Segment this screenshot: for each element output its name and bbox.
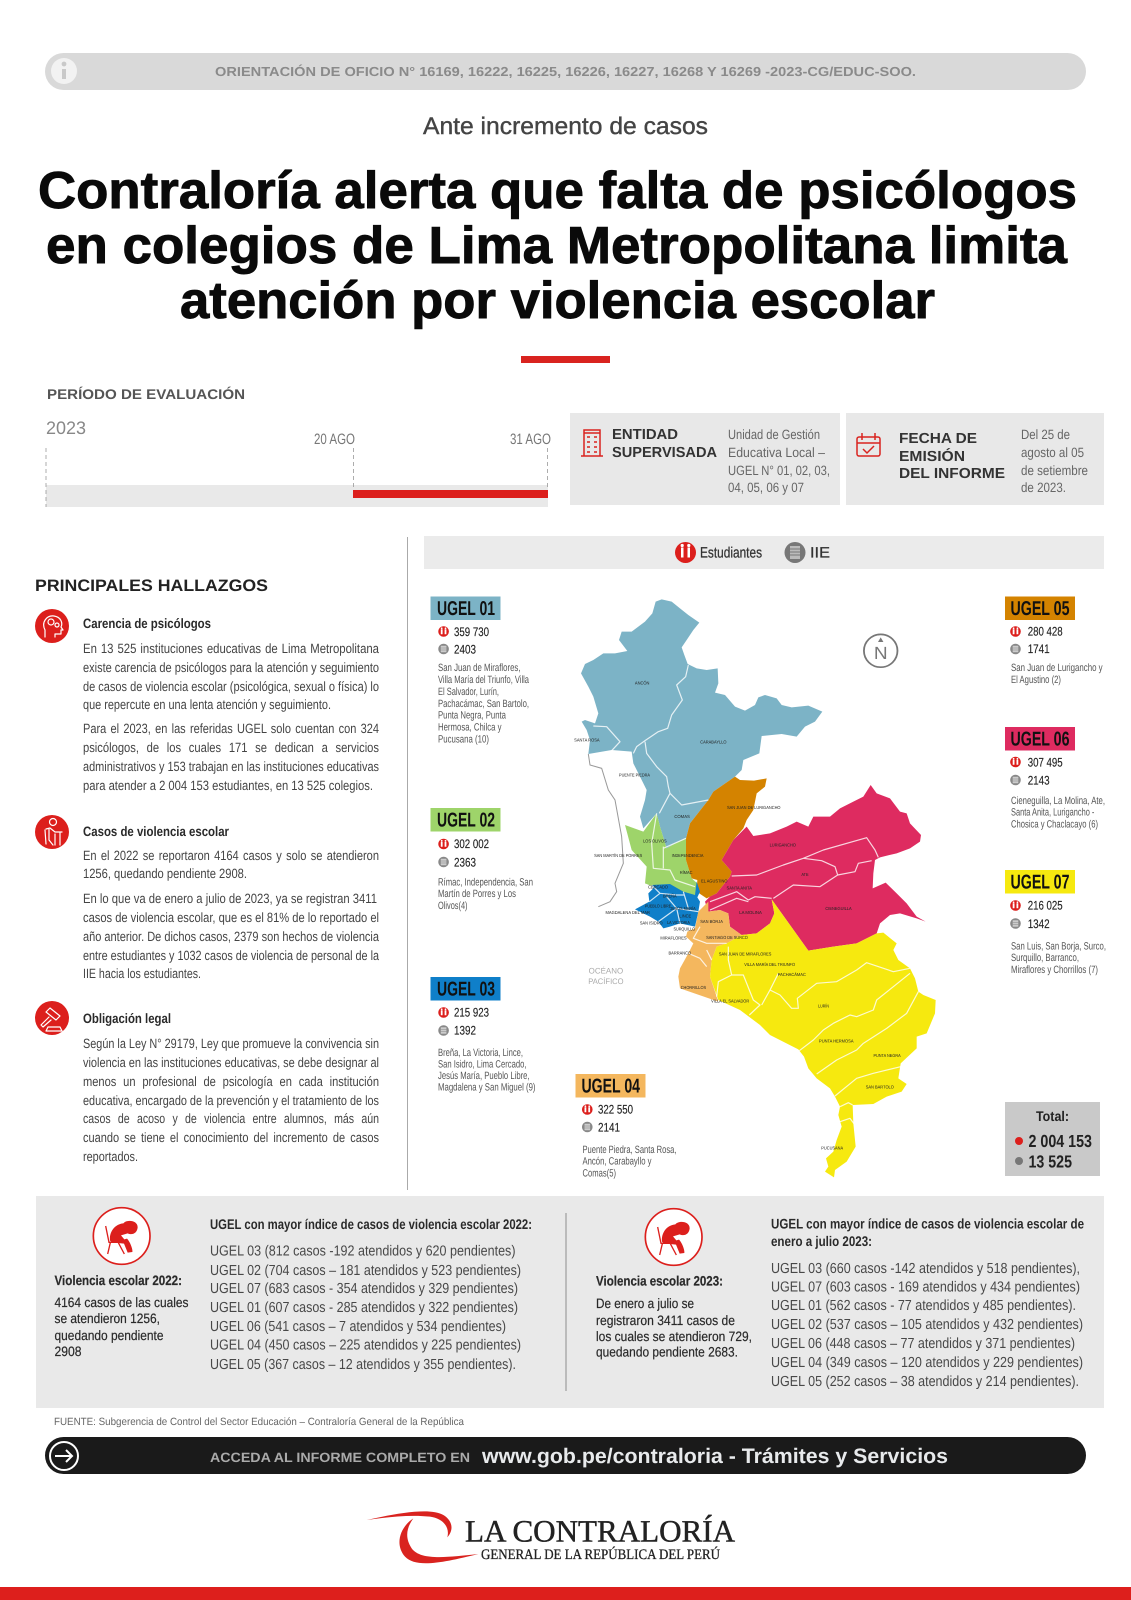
card: UGEL 03: Magdalena y San Miguel (9) xyxy=(438,1082,536,1094)
map district labels: VILLA EL SALVADOR xyxy=(711,999,749,1004)
card: UGEL 02 xyxy=(430,808,533,912)
finding: casos de violencia escolar: entre estudiantes y 1032 casos de violencia de personal de la xyxy=(83,948,379,963)
block: violencia escolar 2023: UGEL 01 (562 casos - 77 atendidos y 485 pendientes). xyxy=(771,1298,1076,1314)
finding: carencia de psicólogos: que repercute en una lenta atención y seguimiento. xyxy=(83,697,331,712)
icon: distressed student 2022 xyxy=(92,1206,151,1266)
total box: Total: xyxy=(1036,1108,1069,1124)
timeline: período de evaluación xyxy=(46,386,551,507)
map district labels: LA MOLINA xyxy=(739,910,762,915)
map district labels: MIRAFLORES xyxy=(660,936,687,941)
label: océano pacífico: OCÉANO xyxy=(589,966,623,976)
district boundaries xyxy=(593,665,918,1125)
card: UGEL 05: El Agustino (2) xyxy=(1011,674,1061,686)
block: violencia escolar 2023: registraron 3411 casos de xyxy=(596,1313,735,1328)
legend bar: Estudiantes xyxy=(700,544,762,562)
map district labels: JESÚS MARÍA xyxy=(670,906,696,911)
label: océano pacífico xyxy=(588,966,624,986)
card: UGEL 01: 359 730 xyxy=(454,625,489,639)
card: UGEL 07: Miraflores y Chorrillos (7) xyxy=(1011,964,1098,976)
block: violencia escolar 2023: quedando pendiente 2683. xyxy=(596,1344,738,1360)
timeline: período de evaluación: 31 AGO xyxy=(510,431,551,448)
card: UGEL 01: UGEL 01 xyxy=(437,598,495,620)
block: violencia escolar 2023: UGEL 07 (603 casos - 169 atendidos y 434 pendientes) xyxy=(771,1280,1080,1296)
finding: casos de violencia escolar: casos de violencia escolar, que es el 81% de lo reportado el xyxy=(83,910,379,925)
card: UGEL 04: 322 550 xyxy=(598,1102,633,1116)
region: UGEL 07 xyxy=(710,899,936,1177)
finding: carencia de psicólogos: para atender a 2 004 153 estudiantes, en 13 525 colegios. xyxy=(83,778,373,793)
map district labels: PUENTE PIEDRA xyxy=(619,773,650,778)
map district labels: ANCÓN xyxy=(635,680,649,686)
call to action bar: ACCEDA AL INFORME COMPLETO EN xyxy=(210,1450,470,1465)
card: UGEL 04: UGEL 04 xyxy=(582,1076,641,1098)
block: violencia escolar 2023: UGEL 04 (349 casos – 120 atendidos y 229 pendientes) xyxy=(771,1355,1083,1371)
card: UGEL 04: Comas(5) xyxy=(582,1168,616,1180)
region: UGEL 05 xyxy=(686,777,767,898)
card: UGEL 01: Pucusana (10) xyxy=(438,734,489,746)
map district labels: SAN JUAN DE MIRAFLORES xyxy=(719,952,771,957)
banner: orientación de oficio: ORIENTACIÓN DE OFICIO N° 16169, 16222, 16225, 16226, 16227, 16268 Y 16269 -2023-CG/EDUC-SOO. xyxy=(215,64,916,79)
finding: casos de violencia escolar: En el 2022 se reportaron 4164 casos y solo se atendieron xyxy=(83,848,379,863)
panel: entidad supervisada: SUPERVISADA xyxy=(612,445,717,461)
card: UGEL 07: 1342 xyxy=(1028,917,1050,931)
heading: principales hallazgos: PRINCIPALES HALLAZGOS xyxy=(35,576,268,595)
finding: casos de violencia escolar: IIE hacia los estudiantes. xyxy=(83,966,201,981)
card: UGEL 02: Olivos(4) xyxy=(438,900,468,912)
column divider xyxy=(407,537,408,1190)
source note: FUENTE: Subgerencia de Control del Sector Educación – Contraloría General de la República xyxy=(54,1416,464,1428)
map district labels: LURÍN xyxy=(818,1004,829,1009)
icon: building xyxy=(581,430,603,456)
card: UGEL 06: UGEL 06 xyxy=(1010,728,1070,750)
timeline: período de evaluación: PERÍODO DE EVALUACIÓN xyxy=(47,386,245,402)
block: violencia escolar 2022 xyxy=(54,1208,532,1373)
title: Contraloría alerta que falta de psicólogos xyxy=(38,162,1077,220)
finding: carencia de psicólogos: psicólogos, de los cuales 171 se dedican a servicios xyxy=(83,740,379,755)
icon: calendar xyxy=(857,433,880,456)
card: UGEL 02: 302 002 xyxy=(454,837,489,851)
block: violencia escolar 2022: UGEL 02 (704 casos – 181 atendidos y 523 pendientes) xyxy=(210,1263,521,1279)
finding: obligación legal: menos un profesional de psicología en cada institución xyxy=(83,1074,379,1089)
card: UGEL 05: 1741 xyxy=(1028,642,1050,656)
logo: La Contraloría xyxy=(367,1511,736,1563)
map district labels: SAN ISIDRO xyxy=(640,921,663,926)
icon: north compass: N xyxy=(874,643,888,663)
footer band xyxy=(0,1587,1131,1600)
map district labels: SAN BARTOLO xyxy=(866,1085,894,1090)
map district labels: SURQUILLO xyxy=(673,927,695,932)
finding: obligación legal: reportados. xyxy=(83,1149,138,1164)
panel divider xyxy=(565,1213,567,1391)
map district labels: SANTA ANITA xyxy=(727,886,752,891)
card: UGEL 03: UGEL 03 xyxy=(437,978,495,1000)
region: UGEL 01 xyxy=(581,599,822,848)
block: violencia escolar 2023: UGEL 02 (537 casos – 105 atendidos y 432 pendientes) xyxy=(771,1317,1083,1333)
panel: fecha de emisión: EMISIÓN xyxy=(899,448,965,465)
panel: entidad supervisada: Unidad de Gestión xyxy=(728,427,820,442)
icon: estudiantes xyxy=(675,542,696,563)
logo: La Contraloría: LA CONTRALORÍA xyxy=(465,1514,736,1548)
finding: obligación legal: violencia en las instituciones educativas, se debe designar al xyxy=(83,1055,379,1070)
map district labels xyxy=(574,680,901,1151)
map district labels: LOS OLIVOS xyxy=(643,839,667,844)
card: UGEL 07: UGEL 07 xyxy=(1010,872,1070,894)
block: violencia escolar 2022: UGEL 05 (367 casos – 12 atendidos y 355 pendientes). xyxy=(210,1357,516,1373)
region: coast outline xyxy=(588,754,623,907)
card: UGEL 05: 280 428 xyxy=(1028,624,1063,638)
map district labels: SANTA ROSA xyxy=(574,738,600,743)
icon: student at desk xyxy=(35,815,69,849)
finding: casos de violencia escolar: En lo que va de enero a julio de 2023, ya se registran 3411 xyxy=(83,891,377,906)
map district labels: SAN BORJA xyxy=(700,919,723,924)
block: violencia escolar 2023: UGEL 05 (252 casos – 38 atendidos y 214 pendientes). xyxy=(771,1374,1079,1390)
panel: fecha de emisión: de setiembre xyxy=(1021,463,1088,478)
block: violencia escolar 2023: los cuales se atendieron 729, xyxy=(596,1329,752,1344)
card: UGEL 01: Villa María del Triunfo, Villa xyxy=(438,674,529,686)
map district labels: SAN MARTÍN DE PORRES xyxy=(594,853,642,858)
map district labels: CERCADO xyxy=(648,885,668,890)
panel: fecha de emisión: DEL INFORME xyxy=(899,466,1005,482)
card: UGEL 03: 1392 xyxy=(454,1024,476,1038)
block: violencia escolar 2022: quedando pendiente xyxy=(54,1328,164,1343)
map district labels: INDEPENDENCIA xyxy=(672,853,703,858)
card: UGEL 01: Hermosa, Chilca y xyxy=(438,722,502,734)
map district labels: COMAS xyxy=(674,814,690,819)
card: UGEL 02: Rímac, Independencia, San xyxy=(438,876,533,888)
card: UGEL 03 xyxy=(430,977,536,1094)
map district labels: EL AGUSTINO xyxy=(701,879,727,884)
finding: obligación legal: casos de acoso y de violencia entre alumnos, más aún xyxy=(83,1111,379,1126)
card: UGEL 06 xyxy=(1005,727,1105,830)
title xyxy=(38,162,1077,330)
block: violencia escolar 2022: UGEL 01 (607 casos - 285 atendidos y 322 pendientes) xyxy=(210,1300,518,1316)
card: UGEL 04: Puente Piedra, Santa Rosa, xyxy=(582,1144,676,1156)
map district labels: PUNTA HERMOSA xyxy=(819,1038,853,1044)
icon: distressed student 2023 xyxy=(644,1208,703,1266)
logo: La Contraloría: GENERAL DE LA REPÚBLICA DEL PERÚ xyxy=(481,1546,720,1563)
map district labels: CARABAYLLO xyxy=(700,740,727,745)
call to action bar: www.gob.pe/contraloria - Trámites y Servicios xyxy=(481,1445,948,1468)
map district labels: PUEBLO LIBRE xyxy=(645,904,671,909)
card: UGEL 01: San Juan de Miraflores, xyxy=(438,662,520,674)
card: UGEL 03: Breña, La Victoria, Lince, xyxy=(438,1047,523,1059)
banner: orientación de oficio xyxy=(45,53,1086,90)
card: UGEL 07: Surquillo, Barranco, xyxy=(1011,952,1079,964)
card: UGEL 05: San Juan de Lurigancho y xyxy=(1011,662,1103,674)
finding: carencia de psicólogos xyxy=(35,609,379,793)
block: violencia escolar 2022: 4164 casos de las cuales xyxy=(54,1295,189,1310)
card: UGEL 05: UGEL 05 xyxy=(1010,598,1070,620)
card: UGEL 01 xyxy=(430,596,529,746)
card: UGEL 03: Jesús María, Pueblo Libre, xyxy=(438,1070,530,1082)
block: violencia escolar 2023: De enero a julio se xyxy=(596,1296,694,1311)
block: violencia escolar 2022: UGEL 04 (450 casos – 225 atendidos y 225 pendientes) xyxy=(210,1338,521,1354)
card: UGEL 07 xyxy=(1005,870,1106,976)
card: UGEL 01: 2403 xyxy=(454,642,476,656)
map district labels: LURIGANCHO xyxy=(770,843,796,848)
map district labels: BARRANCO xyxy=(668,950,691,956)
panel: entidad supervisada xyxy=(570,413,840,505)
map district labels: CIENEGUILLA xyxy=(825,906,852,911)
block: violencia escolar 2022: 2908 xyxy=(54,1344,82,1359)
map district labels: VILLA MARÍA DEL TRIUNFO xyxy=(744,962,795,967)
panel: entidad supervisada: 04, 05, 06 y 07 xyxy=(728,480,804,495)
block: violencia escolar 2022: UGEL con mayor índice de casos de violencia escolar 2022: xyxy=(210,1216,532,1232)
logo swoosh xyxy=(367,1511,478,1564)
finding: obligación legal: cuando se tiene el conocimiento del incremento de casos xyxy=(83,1130,379,1145)
icon: head with gears xyxy=(35,609,69,643)
panel: violencia escolar xyxy=(36,1196,1104,1408)
finding: casos de violencia escolar: año anterior. De dichos casos, 2379 son hechos de violencia xyxy=(83,929,379,944)
block: violencia escolar 2022: UGEL 03 (812 casos -192 atendidos y 620 pendientes) xyxy=(210,1244,516,1260)
legend bar xyxy=(424,536,1104,569)
block: violencia escolar 2022: UGEL 07 (683 casos - 354 atendidos y 329 pendientes) xyxy=(210,1281,518,1297)
map district labels: SANTIAGO DE SURCO xyxy=(706,935,748,940)
panel: entidad supervisada: ENTIDAD xyxy=(612,427,678,443)
card: UGEL 03: San Isidro, Lima Cercado, xyxy=(438,1058,526,1070)
card: UGEL 04: Ancón, Carabayllo y xyxy=(582,1156,652,1168)
timeline: período de evaluación: 20 AGO xyxy=(314,431,355,448)
card: UGEL 07: 216 025 xyxy=(1028,899,1063,913)
card: UGEL 02: 2363 xyxy=(454,855,476,869)
card: UGEL 06: Chosica y Chaclacayo (6) xyxy=(1011,818,1098,830)
card: UGEL 01: Punta Negra, Punta xyxy=(438,710,506,722)
panel: fecha de emisión: agosto al 05 xyxy=(1021,445,1084,460)
icon: arrow xyxy=(50,1442,78,1470)
region: UGEL 04 xyxy=(678,902,742,1002)
map district labels: BREÑA xyxy=(663,893,677,899)
map district labels: MAGDALENA DEL MAR xyxy=(605,910,650,915)
map district labels: ATE xyxy=(801,872,809,877)
map district labels: LA VICTORIA xyxy=(667,920,690,925)
finding: carencia de psicólogos: En 13 525 instituciones educativas de Lima Metropolitana xyxy=(83,641,379,656)
block: violencia escolar 2022: UGEL 06 (541 casos – 7 atendidos y 534 pendientes) xyxy=(210,1319,506,1335)
subtitle: Ante incremento de casos xyxy=(423,113,708,140)
panel: entidad supervisada: Educativa Local – xyxy=(728,445,825,460)
map district labels: LINCE xyxy=(679,914,691,919)
total box: 2 004 153 xyxy=(1028,1131,1092,1151)
finding: casos de violencia escolar: 1256, quedando pendiente 2908. xyxy=(83,866,247,881)
label: océano pacífico: PACÍFICO xyxy=(588,977,624,986)
map district labels: CHORRILLOS xyxy=(681,985,706,990)
finding: casos de violencia escolar: Casos de violencia escolar xyxy=(83,824,230,839)
red title rule xyxy=(521,356,610,363)
map: Lima Metropolitana xyxy=(574,599,936,1177)
block: violencia escolar 2023 xyxy=(596,1209,1084,1390)
card: UGEL 06: 307 495 xyxy=(1028,755,1063,769)
finding: obligación legal: Obligación legal xyxy=(83,1011,171,1026)
card: UGEL 04 xyxy=(576,1074,676,1180)
panel: fecha de emisión: de 2023. xyxy=(1021,480,1066,495)
card: UGEL 04: 2141 xyxy=(598,1120,620,1134)
region: UGEL 02 xyxy=(625,813,697,897)
block: violencia escolar 2022: Violencia escolar 2022: xyxy=(54,1273,182,1288)
card: UGEL 01: El Salvador, Lurín, xyxy=(438,686,499,698)
title: atención por violencia escolar xyxy=(180,272,935,330)
block: violencia escolar 2023: enero a julio 2023: xyxy=(771,1233,872,1249)
call to action bar xyxy=(45,1437,1086,1474)
card: UGEL 03: 215 923 xyxy=(454,1005,489,1019)
total box: 13 525 xyxy=(1028,1152,1072,1172)
panel: fecha de emisión: Del 25 de xyxy=(1021,427,1070,442)
card: UGEL 06: 2143 xyxy=(1028,773,1050,787)
title: en colegios de Lima Metropolitana limita xyxy=(46,217,1068,275)
icon: IIEE xyxy=(784,542,806,563)
region: UGEL 03 xyxy=(635,882,700,928)
panel: entidad supervisada: UGEL N° 01, 02, 03, xyxy=(728,463,830,478)
finding: carencia de psicólogos: administrativos y 153 trabajan en las instituciones educativas xyxy=(83,759,379,774)
finding: obligación legal: educativa, encargado de la prevención y el tratamiento de los xyxy=(83,1093,379,1108)
timeline: período de evaluación: 2023 xyxy=(46,418,86,438)
block: violencia escolar 2023: Violencia escolar 2023: xyxy=(596,1274,723,1288)
map district labels: PACHACÁMAC xyxy=(778,972,806,977)
block: violencia escolar 2023: UGEL 03 (660 casos -142 atendidos y 518 pendientes), xyxy=(771,1261,1080,1277)
total box xyxy=(1005,1102,1100,1176)
block: violencia escolar 2022: se atendieron 1256, xyxy=(54,1311,160,1326)
card: UGEL 02: UGEL 02 xyxy=(437,810,495,832)
finding: carencia de psicólogos: de casos de violencia escolar (psicológica, sexual o física) lo xyxy=(83,679,379,694)
map district labels: SAN JUAN DE LURIGANCHO xyxy=(727,805,780,810)
map district labels: PUCUSANA xyxy=(821,1146,843,1151)
finding: carencia de psicólogos: existe carencia de psicólogos para la atención y seguimiento xyxy=(83,660,379,675)
finding: carencia de psicólogos: Carencia de psicólogos xyxy=(83,616,211,631)
card: UGEL 02: Martín de Porres y Los xyxy=(438,888,516,900)
panel: fecha de emisión: FECHA DE xyxy=(899,431,977,447)
panel: fecha de emisión xyxy=(846,413,1104,505)
finding: obligación legal: Según la Ley N° 29179, Ley que promueve la convivencia sin xyxy=(83,1036,379,1051)
icon: gavel xyxy=(35,1001,69,1035)
legend bar: IIE xyxy=(810,544,830,562)
finding: obligación legal xyxy=(35,1001,379,1164)
card: UGEL 06: Santa Anita, Lurigancho - xyxy=(1011,806,1095,818)
region: UGEL 06 xyxy=(705,785,926,951)
finding: carencia de psicólogos: Para el 2023, en las referidas UGEL solo cuentan con 324 xyxy=(83,721,379,736)
map district labels: RÍMAC xyxy=(680,870,693,875)
card: UGEL 05 xyxy=(1005,596,1103,686)
finding: casos de violencia escolar xyxy=(35,815,379,981)
card: UGEL 01: Pachacámac, San Bartolo, xyxy=(438,698,529,710)
block: violencia escolar 2023: UGEL 06 (448 casos – 77 atendidos y 371 pendientes) xyxy=(771,1336,1075,1352)
icon: north compass xyxy=(864,634,897,667)
